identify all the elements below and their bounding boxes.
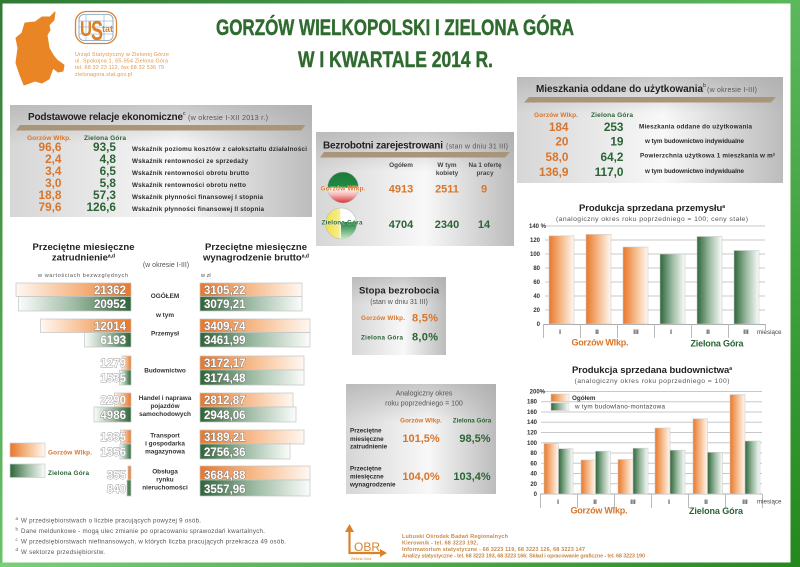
heading: gross wages	[202, 242, 309, 264]
icon: Lubuskie region map	[16, 12, 64, 85]
footnotes: c	[16, 537, 18, 542]
legend: construction chart	[551, 394, 665, 410]
chart: construction production: (analogiczny okres roku poprzedniego = 100)	[574, 378, 730, 385]
panel: dwellings completed: 184	[549, 120, 569, 134]
legend: construction chart: Ogółem	[572, 395, 596, 402]
chart: employment bars: 840	[107, 484, 126, 496]
chart: employment bars: 12014	[94, 321, 127, 333]
chart: employment bars: 20952	[94, 299, 126, 311]
chart: industrial production: 140 %	[529, 224, 547, 230]
chart: wage bars: 2756,36	[204, 447, 246, 459]
sector labels: Transport	[150, 432, 181, 440]
panel: registered unemployed: (stan w dniu 31 III)	[446, 144, 508, 150]
footnotes: d	[16, 547, 18, 552]
chart: wage bars: 3174,48	[204, 373, 246, 385]
chart: industrial production: III	[743, 329, 749, 336]
panel: dwellings completed: 117,0	[595, 165, 624, 179]
panel: dwellings completed	[517, 77, 783, 183]
chart: employment bars: 1535	[100, 373, 127, 385]
panel: registered unemployed: pracy	[476, 170, 494, 177]
heading: gross wages: a,d	[302, 254, 309, 260]
chart: construction production: 100	[527, 441, 538, 447]
unit note: absolute values: w wartościach bezwzględnych	[37, 273, 128, 279]
regional research centre contact: Informatorium statystyczne - 68 3223 119, 68 3223 126, 68 3223 147	[402, 547, 585, 553]
panel: year-on-year comparison: Analogiczny okres	[396, 390, 453, 398]
chart: wage bars: 3409,74	[204, 321, 246, 333]
panel: year-on-year comparison: 104,0%	[402, 471, 440, 483]
chart: industrial production: 0	[537, 322, 541, 328]
chart: wage bars: 3461,99	[204, 335, 246, 347]
chart: construction production: 20	[530, 482, 538, 488]
panel: year-on-year comparison: Przeciętne	[350, 466, 382, 472]
panel: unemployment rate: (stan w dniu 31 III)	[370, 299, 428, 306]
panel: registered unemployed: 9	[481, 184, 487, 196]
panel: basic economic relations: 3,0	[45, 176, 62, 190]
chart: employment bars: 4986	[100, 410, 126, 422]
logo: UStat: tat	[102, 24, 113, 34]
panel: dwellings completed: 136,9	[539, 165, 569, 179]
chart: construction production: miesiące	[757, 498, 782, 506]
chart: industrial production: Gorzów Wlkp.	[572, 338, 628, 348]
logo: UStat: U	[80, 18, 92, 41]
chart: construction production: I	[668, 499, 670, 506]
panel: year-on-year comparison: 103,4%	[453, 471, 491, 483]
chart: construction production: 40	[530, 472, 538, 478]
panel: basic economic relations: 126,6	[86, 200, 116, 214]
panel: basic economic relations: 5,8	[100, 176, 116, 190]
panel: dwellings completed: b	[703, 83, 706, 89]
panel: basic economic relations: Wskaźnik rentowności ze sprzedaży	[132, 158, 248, 165]
panel: year-on-year comparison: miesięczne	[350, 436, 384, 443]
chart: wage bars: 2812,87	[204, 395, 246, 407]
panel: basic economic relations: 3,4	[45, 164, 62, 178]
panel: dwellings completed: 58,0	[546, 150, 569, 164]
panel: registered unemployed: 2511	[435, 184, 459, 196]
icon: Zielona Góra ball	[322, 208, 363, 239]
panel: dwellings completed: Gorzów Wlkp.	[534, 112, 578, 119]
chart: construction production: III	[742, 499, 748, 506]
heading: employment: a,d	[108, 254, 115, 260]
chart: wage bars: 3189,21	[204, 432, 246, 444]
chart: construction production: 200%	[530, 390, 546, 396]
legend: cities: Zielona Góra	[48, 470, 89, 477]
chart: construction production: 140	[527, 420, 538, 426]
office address: ul. Spokojna 1, 65-954 Zielona Góra	[75, 58, 168, 64]
chart: employment bars	[16, 283, 131, 496]
footnotes: W przedsiębiorstwach niefinansowych, w których liczba pracujących przekracza 49 osób.	[21, 538, 286, 546]
panel: dwellings completed: Zielona Góra	[591, 112, 633, 119]
chart: industrial production: Zielona Góra	[690, 338, 744, 348]
legend: cities: Gorzów Wlkp.	[48, 450, 92, 456]
title	[216, 15, 574, 72]
logo: OBR: Zielona Góra	[351, 557, 371, 561]
chart: wage bars: 3684,88	[204, 470, 246, 482]
panel: registered unemployed: Ogółem	[389, 162, 413, 169]
panel: basic economic relations: Wskaźnik rentowności obrotu netto	[132, 182, 246, 189]
chart: construction production: a	[729, 366, 732, 372]
chart: industrial production: Produkcja sprzedana przemysłu	[579, 203, 722, 214]
title: W I KWARTALE 2014 R.	[298, 47, 493, 72]
heading: gross wages: wynagrodzenie brutto	[203, 252, 302, 264]
footnotes: Dane meldunkowe - mogą ulec zmianie po opracowaniu sprawozdań kwartalnych.	[21, 528, 265, 535]
chart: industrial production: 120	[530, 238, 541, 244]
chart: industrial production: I	[559, 329, 561, 336]
chart: industrial production: (analogiczny okres roku poprzedniego = 100; ceny stałe)	[556, 216, 748, 223]
sector labels: Obsługa	[152, 468, 178, 476]
panel: dwellings completed: Mieszkania oddane do użytkowania	[536, 84, 703, 95]
panel: dwellings completed: w tym budownictwo indywidualne	[644, 138, 744, 145]
panel: registered unemployed: kobiety	[436, 170, 459, 177]
regional research centre contact: Analizy statystyczne - tel. 68 3223 193, 68 3223 166; Skład i opracowanie graficzne - tel. 68 3223 190	[402, 554, 645, 560]
chart: industrial production: 20	[533, 308, 541, 314]
chart: construction production: 160	[527, 410, 538, 416]
footnotes: a	[16, 516, 18, 521]
chart: wage bars: 3079,21	[204, 299, 246, 311]
chart: employment bars: 21362	[94, 285, 126, 297]
period note: (w okresie I-III)	[143, 262, 189, 269]
chart: industrial production: 60	[533, 280, 541, 286]
panel: registered unemployed: 14	[478, 219, 491, 231]
panel: dwellings completed: 253	[604, 120, 624, 134]
panel: year-on-year comparison: Gorzów Wlkp.	[400, 418, 442, 424]
regional research centre contact: Lubuski Ośrodek Badań Regionalnych	[402, 534, 509, 540]
panel: basic economic relations: (w okresie I-XII 2013 r.)	[188, 113, 268, 122]
logo: UStat	[76, 12, 116, 46]
chart: construction production: I	[557, 499, 559, 506]
chart: industrial production: 100	[530, 252, 541, 258]
panel: basic economic relations: 93,5	[93, 140, 116, 154]
heading: employment: zatrudnienie	[52, 252, 108, 264]
chart: construction production: 80	[530, 451, 538, 457]
panel: dwellings completed: Powierzchnia użytkowa 1 mieszkania w m²	[640, 152, 775, 160]
panel: unemployment rate	[352, 277, 446, 355]
regional research centre contact: Kierownik - tel. 68 3223 192,	[402, 540, 478, 546]
panel: basic economic relations: Podstawowe relacje ekonomiczne	[28, 112, 183, 123]
chart: construction production: 120	[527, 430, 538, 436]
chart: industrial production: II	[595, 329, 599, 336]
footnotes: W sektorze przedsiębiorstw.	[21, 549, 105, 556]
icon: Gorzów ball	[320, 172, 366, 203]
icon: Gorzów ball: Gorzów Wlkp.	[320, 186, 366, 192]
panel: year-on-year comparison: miesięczne	[350, 474, 384, 480]
sector labels: Budownictwo	[144, 368, 186, 374]
panel: registered unemployed: 2340	[435, 219, 459, 231]
heading: gross wages: Przeciętne miesięczne	[205, 242, 307, 253]
sector labels: w tym	[155, 312, 174, 319]
chart: construction production	[527, 365, 782, 516]
heading: employment	[32, 242, 134, 264]
panel: dwellings completed: 64,2	[601, 150, 624, 164]
sector labels	[139, 291, 192, 492]
sector labels: Handel i naprawa	[139, 395, 192, 402]
panel: unemployment rate: Gorzów Wlkp.	[361, 315, 405, 322]
sector labels: Przemysł	[151, 330, 179, 338]
panel: registered unemployed: Bezrobotni zarejestrowani	[323, 140, 443, 152]
sector labels: magazynowa	[145, 448, 185, 456]
panel: basic economic relations: 79,6	[39, 200, 62, 214]
panel: dwellings completed: (w okresie I-III)	[707, 87, 757, 94]
chart: industrial production: 80	[533, 266, 541, 272]
chart: industrial production: II	[706, 329, 710, 336]
sector labels: OGÓŁEM	[151, 291, 179, 300]
panel: basic economic relations: 4,8	[100, 152, 116, 166]
panel: basic economic relations	[10, 105, 312, 217]
panel: registered unemployed: W tym	[437, 162, 457, 169]
panel: unemployment rate: Zielona Góra	[361, 334, 403, 342]
office address	[75, 52, 169, 78]
panel: basic economic relations: Gorzów Wlkp.	[27, 135, 71, 142]
panel: basic economic relations: Wskaźnik płynności finansowej II stopnia	[132, 206, 264, 213]
sector labels: i gospodarka	[145, 440, 185, 448]
panel: year-on-year comparison: wynagrodzenie	[349, 482, 396, 488]
panel: registered unemployed: 4704	[389, 219, 414, 231]
chart: construction production: Gorzów Wlkp.	[570, 506, 628, 516]
chart: employment bars: 1356	[100, 447, 126, 459]
panel: registered unemployed	[316, 132, 514, 246]
chart: industrial production: I	[670, 329, 672, 336]
panel: basic economic relations: Wskaźnik rentowności obrotu brutto	[132, 170, 249, 177]
icon: Zielona Góra ball: Zielona Góra	[322, 220, 363, 226]
chart: industrial production: III	[633, 329, 639, 336]
chart: construction production: 0	[534, 492, 538, 498]
panel: year-on-year comparison: Zielona Góra	[453, 418, 492, 424]
panel: year-on-year comparison: 101,5%	[402, 433, 440, 445]
panel: unemployment rate: Stopa bezrobocia	[359, 286, 440, 296]
chart: wage bars: 3557,96	[204, 484, 246, 496]
heading: employment: Przeciętne miesięczne	[32, 242, 134, 253]
panel: year-on-year comparison: 98,5%	[459, 433, 491, 445]
chart: employment bars: 1335	[100, 432, 127, 444]
panel: year-on-year comparison: roku poprzedniego = 100	[385, 400, 463, 408]
panel: registered unemployed: Na 1 ofertę	[468, 162, 502, 169]
footnotes: W przedsiębiorstwach o liczbie pracujących powyżej 9 osób.	[21, 518, 201, 524]
chart: employment bars: 6193	[100, 335, 126, 347]
panel: dwellings completed: 20	[555, 134, 569, 148]
panel: dwellings completed: 19	[610, 134, 624, 148]
panel: unemployment rate: 8,5%	[412, 312, 438, 324]
panel: basic economic relations: Wskaźnik poziomu kosztów z całokształtu działalności	[132, 146, 307, 153]
chart: construction production: 60	[530, 462, 538, 468]
sector labels: rynku	[156, 476, 174, 484]
chart: construction production: 180	[527, 400, 538, 406]
panel: unemployment rate: 8,0%	[412, 332, 438, 344]
panel: year-on-year comparison: zatrudnienie	[350, 444, 388, 450]
logo: OBR	[345, 524, 387, 561]
panel: basic economic relations: 2,4	[45, 152, 62, 166]
chart: industrial production: miesiące	[757, 329, 782, 336]
panel: basic economic relations: Wskaźnik płynności finansowej I stopnia	[132, 194, 263, 201]
chart: construction production: II	[593, 499, 597, 506]
unit note: PLN: w zł	[200, 273, 211, 279]
panel: dwellings completed: Mieszkania oddane do użytkowania	[639, 124, 752, 130]
chart: construction production: III	[630, 499, 636, 506]
chart: wage bars: 2948,06	[204, 410, 246, 422]
footnotes	[16, 516, 286, 556]
chart: construction production: Zielona Góra	[689, 506, 744, 516]
sector labels: samochodowych	[139, 411, 191, 418]
panel: year-on-year comparison	[346, 384, 496, 494]
office address: tel. 68 32 23 112, fax 68 32 536 79	[75, 65, 164, 71]
office address: Urząd Statystyczny w Zielonej Górze	[75, 52, 169, 58]
sector labels: nieruchomości	[142, 484, 188, 492]
panel: registered unemployed: 4913	[389, 184, 413, 196]
panel: basic economic relations: 6,5	[100, 164, 116, 178]
title: GORZÓW WIELKOPOLSKI I ZIELONA GÓRA	[216, 15, 574, 40]
legend: construction chart: w tym budowlano-montażowa	[574, 404, 665, 410]
chart: employment bars: 2290	[100, 395, 126, 407]
panel: basic economic relations: c	[183, 111, 186, 117]
chart: industrial production: a	[722, 204, 725, 210]
chart: wage bars: 3172,17	[204, 358, 246, 370]
chart: wage bars	[200, 283, 310, 496]
chart: industrial production: 40	[533, 294, 541, 300]
footnotes: b	[16, 526, 18, 532]
chart: construction production: II	[704, 499, 708, 506]
regional research centre contact	[402, 534, 645, 560]
panel: dwellings completed: w tym budownictwo indywidualne	[644, 168, 744, 175]
logo: UStat: S	[91, 15, 103, 46]
panel: basic economic relations: 96,6	[39, 140, 62, 154]
chart: employment bars: 355	[107, 470, 127, 482]
chart: employment bars: 1279	[100, 358, 126, 370]
legend: cities	[10, 443, 92, 478]
panel: basic economic relations: Zielona Góra	[84, 135, 126, 142]
chart: construction production: Produkcja sprzedana budownictwa	[572, 365, 729, 376]
chart: wage bars: 3105,22	[204, 285, 246, 297]
sector labels: pojazdów	[150, 403, 180, 410]
office address: zielonagora.stat.gov.pl	[75, 72, 132, 78]
panel: year-on-year comparison: Przeciętne	[350, 428, 382, 434]
panel: basic economic relations: 18,8	[39, 188, 62, 202]
logo: OBR: OBR	[354, 540, 380, 554]
panel: basic economic relations: 57,3	[93, 188, 116, 202]
chart: industrial production	[529, 203, 782, 348]
